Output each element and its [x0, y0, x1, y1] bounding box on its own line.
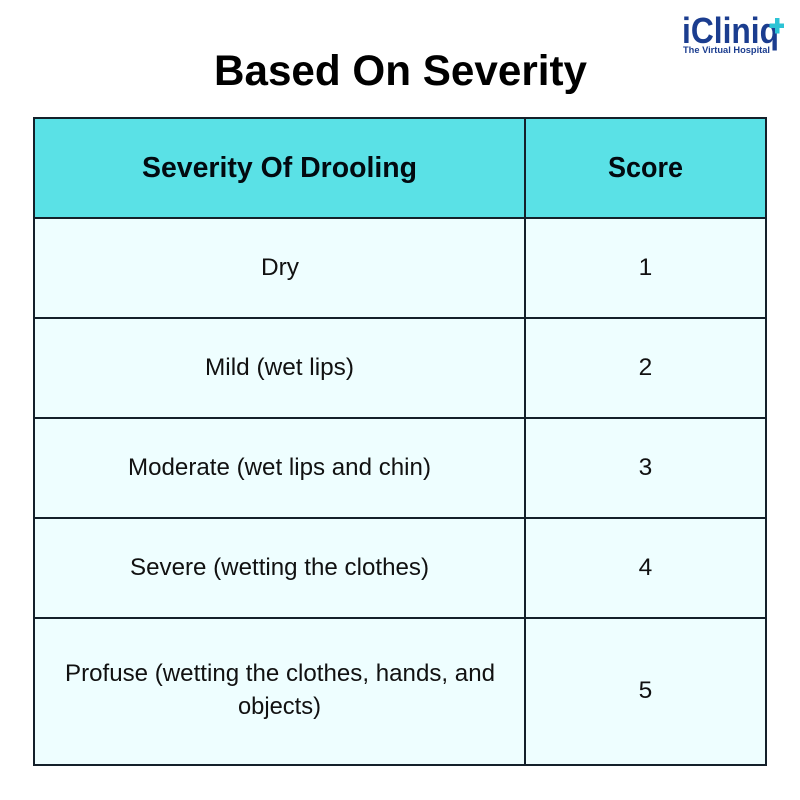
row 1 severity: Dry — [261, 254, 300, 281]
row 1 score: 1 — [639, 254, 652, 281]
row 3 score: 3 — [639, 454, 652, 481]
row 2 severity: Mild (wet lips) — [205, 354, 354, 381]
header: score: Score — [608, 152, 683, 184]
row 5 severity — [65, 660, 495, 720]
row 5 severity: objects) — [238, 693, 321, 720]
title: Based On Severity — [214, 47, 587, 95]
row 5 severity: Profuse (wetting the clothes, hands, and — [65, 660, 495, 687]
logo wordmark: iCliniq — [682, 10, 779, 51]
row 5 score: 5 — [639, 677, 652, 704]
row 4 severity: Severe (wetting the clothes) — [130, 554, 429, 581]
row 4 score: 4 — [639, 554, 652, 581]
row 3 severity: Moderate (wet lips and chin) — [128, 454, 431, 481]
table — [34, 118, 766, 765]
row 2 score: 2 — [639, 354, 652, 381]
logo tagline: The Virtual Hospital — [683, 45, 770, 55]
header: severity of drooling: Severity Of Drooling — [142, 152, 417, 184]
table header background — [34, 118, 766, 218]
table body background — [34, 218, 766, 765]
logo: iCliniq — [682, 10, 784, 55]
logo plus icon — [770, 18, 784, 34]
